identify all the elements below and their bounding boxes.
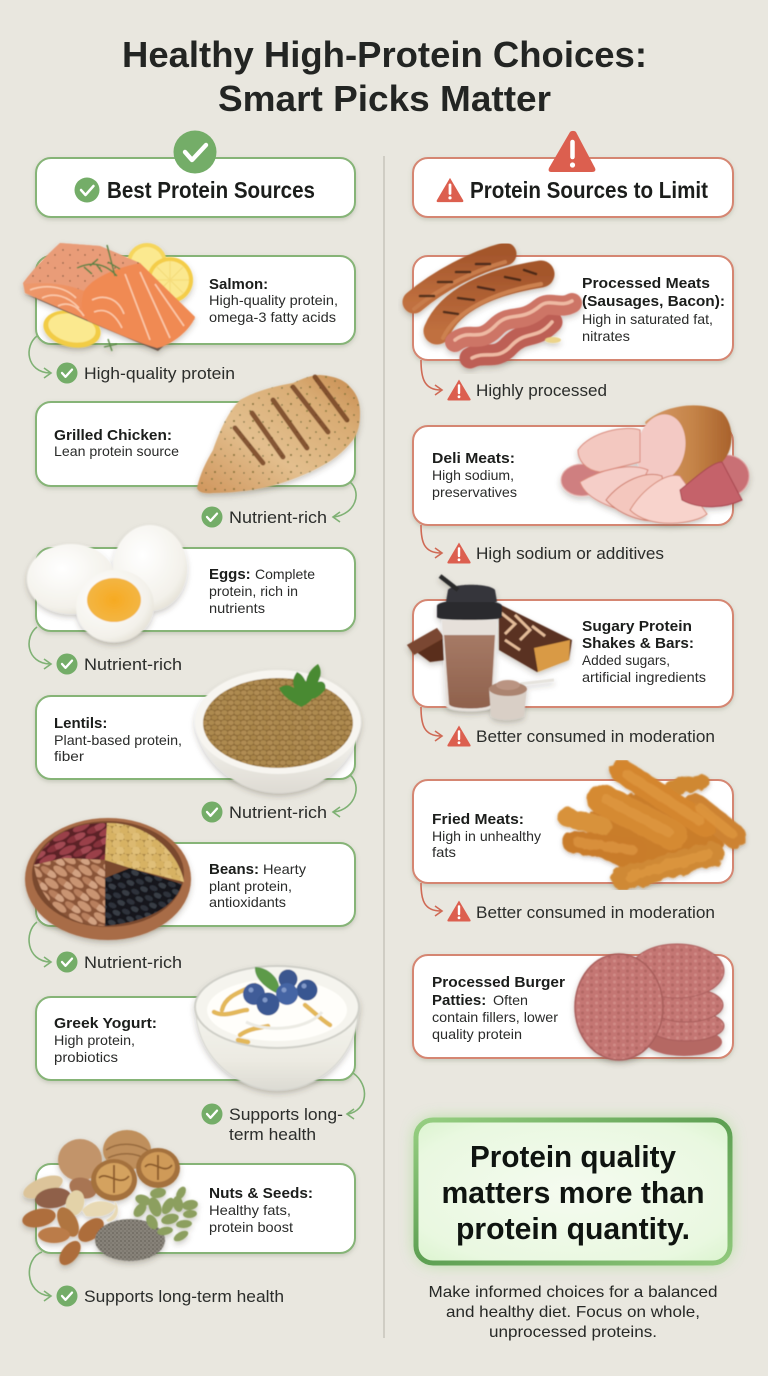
description: Patties:: [432, 992, 486, 1009]
description: Greek Yogurt:: [54, 1015, 157, 1032]
icon: salmon fillets with lemon: [23, 243, 196, 353]
callout: protein quality: matters more than: [442, 1175, 704, 1210]
tag: nutrient-rich: [202, 802, 327, 822]
description: High-quality protein,: [209, 292, 338, 308]
description: protein boost: [209, 1219, 293, 1235]
icon: bowl of mixed beans: [25, 818, 191, 940]
icon: bowl of lentils: [195, 664, 361, 793]
description: Healthy fats,: [209, 1202, 291, 1218]
callout: protein quality: protein quantity.: [456, 1211, 690, 1246]
description: [209, 566, 315, 616]
tag: supports long-term health: Supports long-: [229, 1105, 343, 1124]
description: fiber: [54, 748, 84, 764]
tag: better consumed in moderation: Better consumed in moderation: [476, 903, 715, 922]
arrow: lentils to tag: [333, 775, 356, 817]
item: nuts and seeds: [20, 1130, 355, 1269]
arrow: deli to tag: [421, 525, 442, 558]
arrow: salmon to tag: [29, 336, 51, 378]
panel: protein sources to limit: [407, 131, 749, 1341]
description: Added sugars,: [582, 652, 670, 668]
description: antioxidants: [209, 894, 286, 910]
description: artificial ingredients: [582, 669, 706, 685]
heading: best protein sources: Best Protein Sources: [107, 177, 315, 203]
tag: nutrient-rich: Nutrient-rich: [229, 803, 327, 822]
description: Processed Burger: [432, 974, 565, 991]
tag: nutrient-rich: Nutrient-rich: [229, 508, 327, 527]
item: greek yogurt: [36, 966, 359, 1090]
tag: high sodium or additives: High sodium or additives: [476, 544, 664, 563]
description: [209, 276, 338, 325]
description: preservatives: [432, 484, 517, 500]
item: deli meats: [413, 405, 749, 525]
icon: sausages and bacon: [414, 254, 572, 358]
description: Lean protein source: [54, 443, 179, 459]
footer note: and healthy diet. Focus on whole,: [446, 1304, 700, 1321]
description: Fried Meats:: [432, 811, 524, 828]
description: nutrients: [209, 600, 265, 616]
description: protein, rich in: [209, 583, 298, 599]
arrow: yogurt to tag: [347, 1073, 364, 1119]
heading: best protein sources: [36, 130, 355, 217]
title: [122, 34, 647, 119]
title: Healthy High-Protein Choices:: [122, 34, 647, 75]
description: [432, 450, 517, 500]
description: Eggs:: [209, 566, 251, 583]
item: eggs: [27, 525, 355, 649]
description: High in saturated fat,: [582, 311, 713, 327]
icon: shake, bar and chocolate: [407, 576, 572, 720]
tag: nutrient-rich: [202, 506, 327, 528]
description: nitrates: [582, 328, 630, 344]
description: High protein,: [54, 1032, 135, 1048]
tag: high-quality protein: High-quality protein: [84, 364, 235, 383]
callout: protein quality: [416, 1120, 730, 1263]
description: omega-3 fatty acids: [209, 309, 336, 325]
arrow: chicken to tag: [333, 482, 356, 522]
arrow: processed to tag: [421, 360, 442, 395]
arrow: eggs to tag: [29, 627, 51, 669]
tag: supports long-term health: [202, 1104, 343, 1144]
item: beans: [25, 818, 355, 940]
tag: nutrient-rich: Nutrient-rich: [84, 655, 182, 674]
arrow: shake to tag: [421, 707, 442, 741]
description: (Sausages, Bacon):: [582, 293, 725, 310]
icon: nuts and seeds: [20, 1130, 199, 1269]
description: contain fillers, lower: [432, 1009, 558, 1025]
item: lentils: [36, 664, 361, 793]
description: Processed Meats: [582, 275, 710, 292]
arrow: beans to tag: [29, 922, 51, 967]
item: grilled chicken: [36, 375, 360, 493]
arrow: fried to tag: [421, 883, 442, 916]
icon: fried chicken tenders: [567, 771, 734, 879]
icon: burger patties: [575, 944, 724, 1060]
tag: nutrient-rich: [56, 952, 182, 972]
item: salmon: [23, 243, 355, 353]
tag: nutrient-rich: [56, 654, 182, 674]
description: Plant-based protein,: [54, 732, 182, 748]
icon: deli meats: [561, 405, 749, 523]
tag: nutrient-rich: Nutrient-rich: [84, 953, 182, 972]
item: processed burger patties: [413, 944, 733, 1060]
description: [54, 427, 179, 459]
footer note: [428, 1284, 718, 1341]
description: High sodium,: [432, 467, 514, 483]
tag: highly processed: Highly processed: [476, 381, 607, 400]
description: fats: [432, 844, 456, 860]
description: Shakes & Bars:: [582, 635, 694, 652]
footer note: unprocessed proteins.: [489, 1324, 657, 1341]
description: High in unhealthy: [432, 828, 541, 844]
description: Often: [493, 992, 528, 1008]
description: Lentils:: [54, 715, 107, 732]
icon: eggs: [27, 525, 187, 649]
description: Sugary Protein: [582, 618, 692, 635]
description: [54, 1015, 157, 1065]
tag: supports long-term health: term health: [229, 1125, 316, 1144]
item: processed meats: [413, 254, 733, 360]
icon: glass bowl of yogurt with blueberries: [195, 966, 359, 1090]
tag: better consumed in moderation: Better consumed in moderation: [476, 727, 715, 746]
panel: best protein sources: [20, 130, 364, 1306]
callout: protein quality: Protein quality: [470, 1139, 677, 1174]
description: probiotics: [54, 1049, 118, 1065]
icon: grilled chicken breast: [197, 375, 360, 493]
description: Salmon:: [209, 276, 268, 293]
item: fried meats: [413, 771, 734, 883]
footer note: Make informed choices for a balanced: [428, 1284, 718, 1301]
description: Nuts & Seeds:: [209, 1185, 313, 1202]
description: quality protein: [432, 1026, 522, 1042]
description: Deli Meats:: [432, 450, 515, 467]
heading: protein sources to limit: [413, 131, 733, 217]
description: Beans:: [209, 861, 259, 878]
tag: supports long-term health: Supports long-term health: [84, 1287, 284, 1306]
description: [432, 974, 565, 1042]
heading: protein sources to limit: Protein Sources to Limit: [470, 177, 708, 203]
description: [209, 861, 306, 910]
arrow: nuts to tag: [29, 1252, 51, 1301]
item: sugary shakes and bars: [407, 576, 733, 720]
description: [582, 618, 706, 685]
description: [582, 275, 725, 344]
description: plant protein,: [209, 878, 292, 894]
description: [432, 811, 541, 860]
description: [209, 1185, 313, 1235]
description: Grilled Chicken:: [54, 427, 172, 444]
title: Smart Picks Matter: [218, 78, 551, 119]
description: Hearty: [263, 861, 306, 877]
description: [54, 715, 182, 764]
description: Complete: [255, 566, 315, 582]
